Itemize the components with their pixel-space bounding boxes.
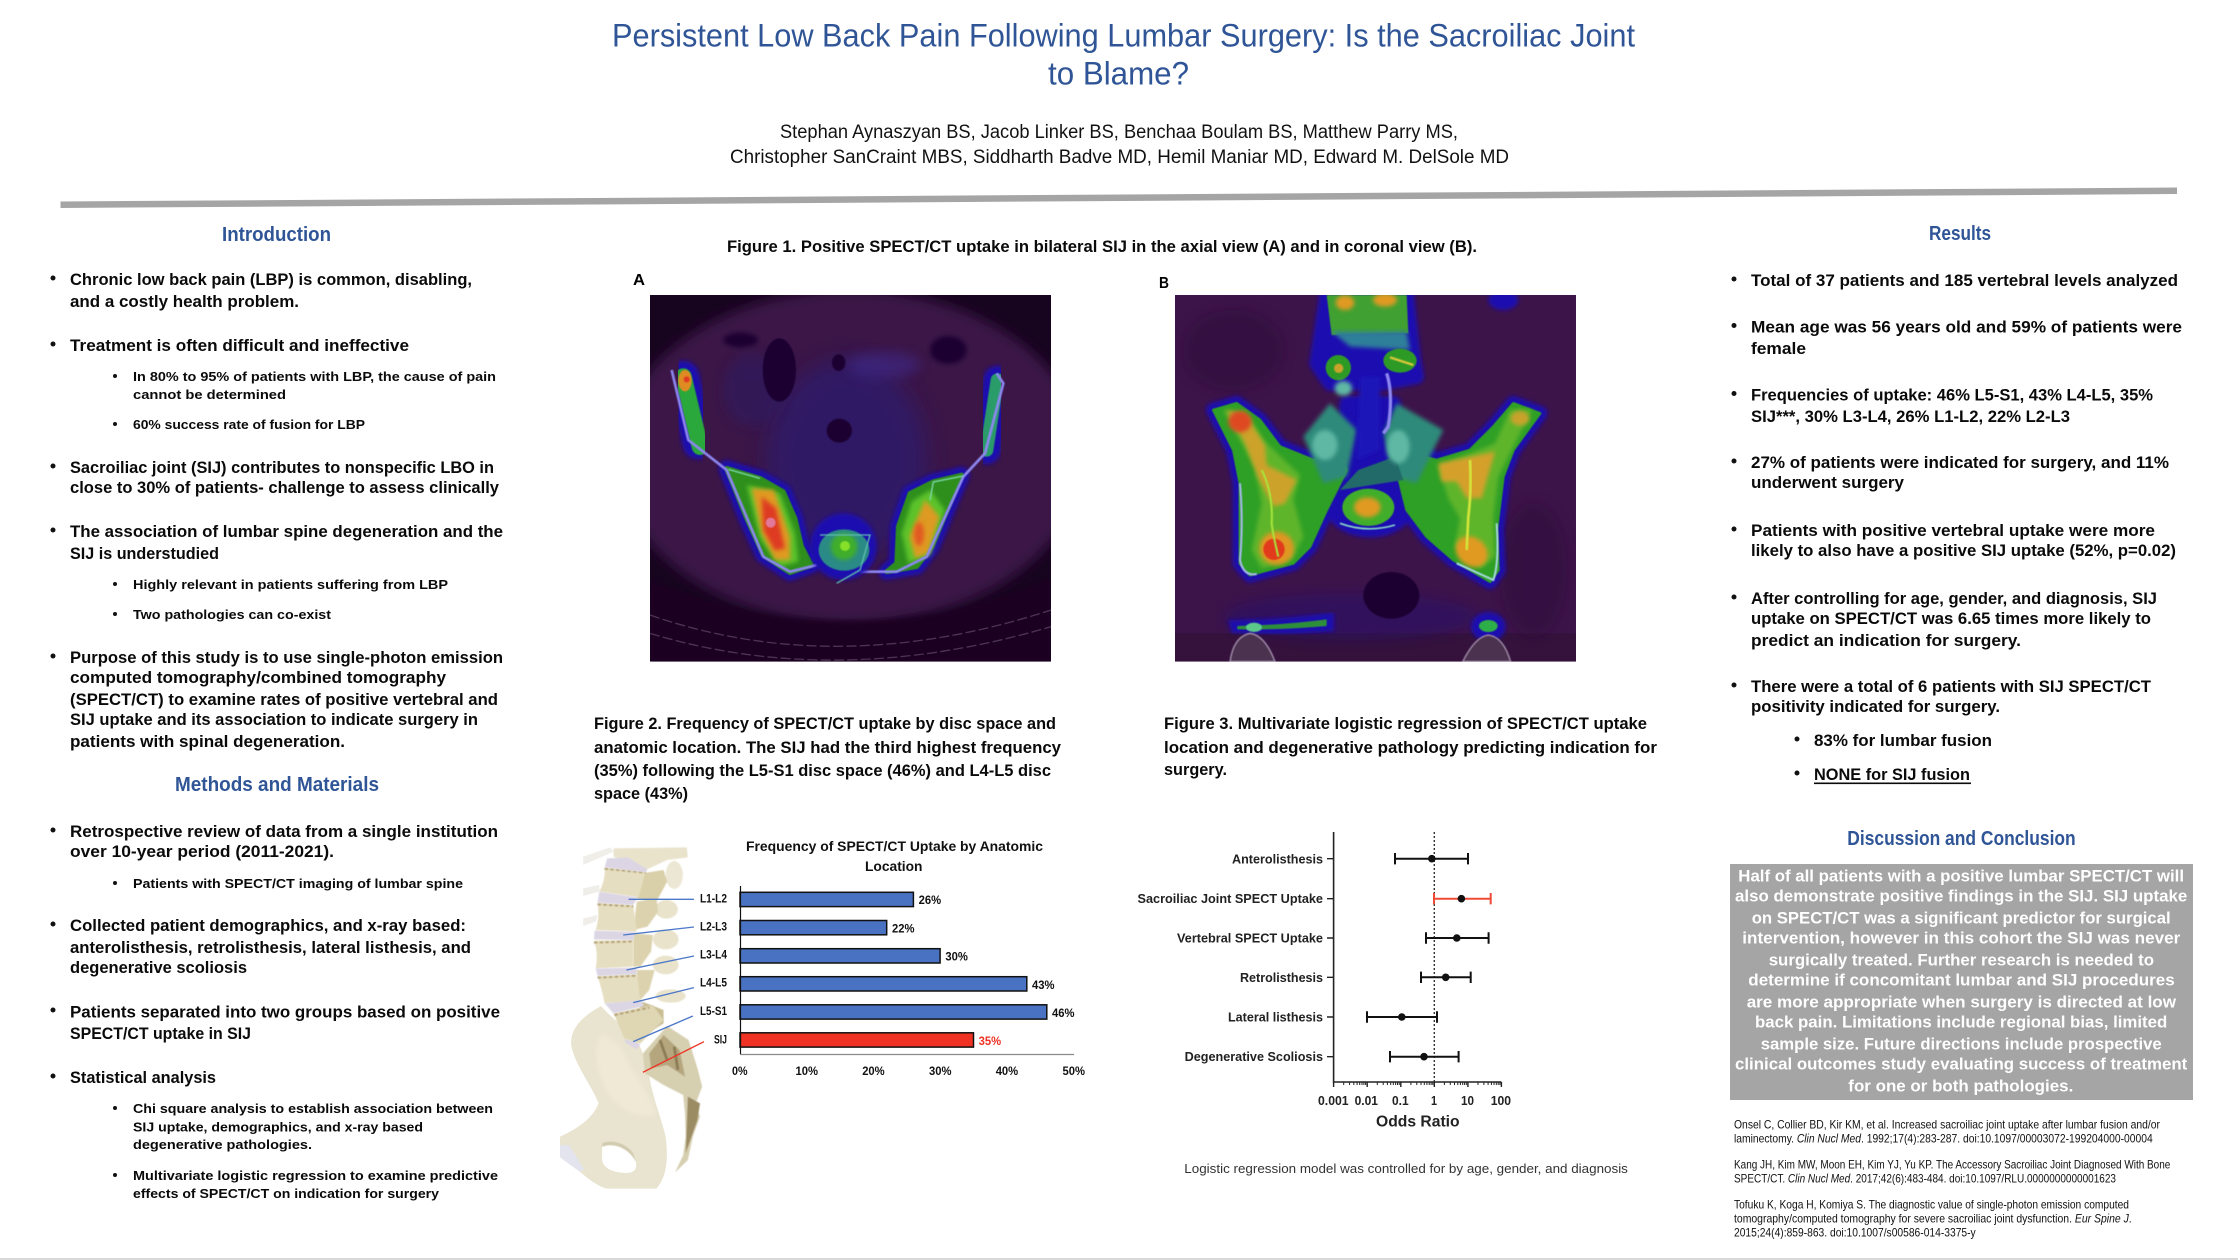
sacrum and coccyx [643,1026,702,1173]
references [1734,1118,2171,1240]
panel: conclusion callout: also demonstrate positive findings in the SIJ. SIJ uptake [1735,887,2187,906]
bullet: vertebral uptake [1732,522,2176,560]
chart title [746,839,1043,875]
bullet: purpose: computed tomography/combined tomography [70,669,447,687]
figure 3 caption [1164,715,1658,779]
bullet: vertebral uptake: Patients with positive vertebral uptake were more [1751,522,2155,540]
panel: conclusion callout: back pain. Limitations include regional bias, limited [1755,1012,2167,1031]
image: axial SPECT/CT scan A [650,295,1051,662]
footnote: Logistic regression model was controlled for by age, gender, and diagnosis [1184,1161,1628,1176]
bullet: sacroiliac joint [50,459,500,497]
heat map: right iliac uptake [860,373,1003,572]
category labels: L4-L5 [700,976,727,990]
bullet: controlled result: After controlling for age, gender, and diagnosis, SIJ [1751,590,2157,608]
bullet: statistical analysis: degenerative pathologies. [133,1137,312,1152]
references: SPECT/CT. Clin Nucl Med. 2017;42(6):483-484. doi:10.1097/RLU.0000000000001623 [1734,1172,2116,1186]
bullet: mean age [1732,318,2182,358]
bullet: mean age: Mean age was 56 years old and 59% of patients were [1751,318,2182,336]
heat map: butterfly halo [1213,295,1540,582]
bottom edge band [0,1258,2238,1260]
bullet: purpose: Purpose of this study is to use single-photon emission [70,649,503,667]
bullet: patient groups: Patients separated into two groups based on positive [70,1004,500,1022]
figure 3 caption: location and degenerative pathology predicting indication for [1164,739,1658,757]
x axis labels: 40% [996,1064,1018,1078]
panel: conclusion callout: are more appropriate when surgery is directed at low [1747,992,2177,1011]
bullet: chronic low back pain: Chronic low back pain (LBP) is common, disabling, [70,271,472,289]
bullet: association: SIJ is understudied [70,545,219,563]
bullet: retrospective review [50,823,498,891]
bullet: chronic low back pain [50,271,472,311]
panel: conclusion callout: on SPECT/CT was a significant predictor for surgical [1752,908,2171,927]
bullet: statistical analysis: Multivariate logistic regression to examine predictive [133,1168,498,1183]
bullet: retrospective review: Patients with SPECT/CT imaging of lumbar spine [133,876,463,891]
bullet: collected demographics: Collected patient demographics, and x-ray based: [70,917,466,935]
bullet: controlled result: predict an indication for surgery. [1751,632,2021,650]
chart title: Location [865,859,922,875]
figure 3 caption: surgery. [1164,761,1227,779]
category labels: L3-L4 [700,948,727,962]
bullet: collected demographics: anterolisthesis, retrolisthesis, lateral listhesis, and [70,939,471,957]
ribs [583,847,614,926]
value labels: 22% [892,922,915,936]
references: Onsel C, Collier BD, Kir KM, et al. Increased sacroiliac joint uptake after lumbar fusion and/or [1734,1118,2160,1132]
reference line at odds ratio 1 [1433,832,1435,1082]
panel: introduction and methods column [50,224,503,1201]
row labels: Anterolisthesis [1232,851,1323,866]
row labels: Lateral listhesis [1228,1010,1323,1025]
bullet: SIJ positive patients [1732,678,2151,784]
bullet: mean age: female [1751,340,1806,358]
x axis tick labels: 1 [1431,1093,1437,1108]
bullet: frequencies: Frequencies of uptake: 46% L5-S1, 43% L4-L5, 35% [1751,386,2153,404]
bullet: collected demographics: degenerative scoliosis [70,959,247,977]
figure 2 caption: Figure 2. Frequency of SPECT/CT uptake by disc space and [594,715,1056,733]
bullet: totals: Total of 37 patients and 185 vertebral levels analyzed [1751,272,2178,290]
label B: B [1159,275,1169,292]
bullet: statistical analysis: Statistical analysis [70,1069,216,1087]
x axis title: Odds Ratio [1376,1114,1460,1131]
row labels [1138,851,1323,1064]
bars [740,892,1047,1047]
bullet: SIJ positive patients: NONE for SIJ fusion [1814,766,1970,784]
panel: results [1732,223,2182,784]
heat map: central sacral uptake [810,513,877,588]
heat map: left iliac uptake [672,370,817,573]
panel: conclusion callout: sample size. Future directions include prospective [1761,1034,2162,1053]
interval: retrolisthesis [1421,972,1471,983]
figure 1 caption: Figure 1. Positive SPECT/CT uptake in bilateral SIJ in the axial view (A) and in coronal view (B). [727,238,1477,256]
x axis labels: 20% [862,1064,885,1078]
illustration: lumbar spine and pelvis [560,847,704,1189]
bullet: association: Highly relevant in patients suffering from LBP [133,577,448,592]
authors: Christopher SanCraint MBS, Siddharth Badve MD, Hemil Maniar MD, Edward M. DelSole MD [730,147,1509,168]
posterior processes [614,847,688,1037]
rectum air [1363,572,1419,619]
x axis labels: 10% [796,1064,818,1078]
bullet: purpose: patients with spinal degeneration. [70,733,345,751]
axes and ticks [1327,832,1501,1087]
bullet: statistical analysis: Chi square analysis to establish association between [133,1101,493,1116]
row labels: Vertebral SPECT Uptake [1177,931,1323,946]
panel: conclusion callout [1730,864,2193,1100]
vertebral bodies [594,867,664,1043]
category labels: L2-L3 [700,919,727,933]
panel: conclusion callout: surgically treated. Further research is needed to [1769,950,2154,969]
bullet: chronic low back pain: and a costly health problem. [70,293,299,311]
title [612,18,1635,92]
interval: sacroiliac joint uptake [1434,893,1491,904]
x axis tick labels: 0.1 [1392,1093,1409,1108]
heat map: right wing [1397,403,1540,582]
heading: methods and materials: Methods and Materials [175,774,379,796]
title: Persistent Low Back Pain Following Lumbar Surgery: Is the Sacroiliac Joint [612,18,1635,54]
x axis tick labels: 10 [1461,1093,1474,1108]
value labels: 43% [1032,978,1055,992]
bullet: treatment: 60% success rate of fusion for LBP [133,417,365,432]
bullet: surgery rates [1732,454,2169,492]
bullet: association: Two pathologies can co-exist [133,607,332,622]
bullet: SIJ positive patients: 83% for lumbar fusion [1814,732,1992,750]
category labels: L1-L2 [700,892,727,906]
bullet: controlled result: uptake on SPECT/CT was 6.65 times more likely to [1751,610,2151,628]
value labels: 46% [1052,1006,1075,1020]
bullet: statistical analysis: effects of SPECT/CT on indication for surgery [133,1186,440,1201]
figure 2 caption [594,715,1062,803]
bullet: surgery rates: 27% of patients were indicated for surgery, and 11% [1751,454,2169,472]
figure 2 caption: (35%) following the L5-S1 disc space (46%) and L4-L5 disc [594,762,1051,780]
axes [740,886,742,1054]
value labels: 30% [945,950,968,964]
interval: vertebral uptake [1426,932,1489,944]
row labels: Degenerative Scoliosis [1185,1049,1323,1064]
x axis labels: 50% [1062,1064,1085,1078]
bullet: sacroiliac joint: Sacroiliac joint (SIJ) contributes to nonspecific LBO in [70,459,494,477]
x axis tick labels: 0.01 [1355,1093,1378,1108]
figure 3 caption: Figure 3. Multivariate logistic regression of SPECT/CT uptake [1164,715,1647,733]
interval: anterolisthesis [1395,853,1468,864]
value labels [892,893,1075,1048]
bullet: purpose: (SPECT/CT) to examine rates of positive vertebral and [70,691,498,709]
x axis tick labels: 100 [1491,1093,1511,1108]
x axis line [740,1054,1074,1056]
bullet: controlled result [1732,590,2157,650]
bullet: statistical analysis [50,1069,498,1201]
category labels: L5-S1 [700,1004,727,1018]
bullet: sacroiliac joint: close to 30% of patients- challenge to assess clinically [70,479,500,497]
title: to Blame? [1048,56,1189,92]
heading: discussion and conclusion: Discussion and Conclusion [1847,828,2076,850]
bullet: SIJ positive patients: positivity indicated for surgery. [1751,698,2000,716]
bullet: retrospective review: over 10-year period (2011-2021). [70,843,334,861]
x axis labels [732,1064,1085,1078]
bullet: SIJ positive patients: There were a total of 6 patients with SIJ SPECT/CT [1751,678,2151,696]
image: coronal SPECT/CT scan B [1175,290,1576,662]
references: tomography/computed tomography for severe sacroiliac joint dysfunction. Eur Spine J. [1734,1212,2132,1226]
bullet: collected demographics [50,917,471,977]
bullet: treatment: In 80% to 95% of patients with LBP, the cause of pain [133,369,496,384]
panel: conclusion callout: for one or both pathologies. [1848,1076,2073,1095]
figure 2 caption: anatomic location. The SIJ had the third highest frequency [594,739,1062,757]
bullet: association: The association of lumbar spine degeneration and the [70,523,503,541]
forest plot: odds ratios [1138,832,1628,1176]
panel: conclusion callout: intervention, however in this cohort the SIJ was never [1742,929,2181,948]
references: laminectomy. Clin Nucl Med. 1992;17(4):283-287. doi:10.1097/00003072-199204000-00004 [1734,1132,2153,1146]
category labels: SIJ [714,1032,727,1046]
references: Tofuku K, Koga H, Komiya S. The diagnostic value of single-photon emission computed [1734,1198,2129,1212]
x axis tick labels [1318,1093,1511,1108]
level pointer lines [623,899,694,1042]
bullet: purpose: SIJ uptake and its association to indicate surgery in [70,711,478,729]
x axis tick labels: 0.001 [1318,1093,1349,1108]
bar chart: frequency of uptake [700,839,1085,1078]
authors [730,122,1509,168]
interval: degenerative scoliosis [1390,1051,1459,1062]
bullet: surgery rates: underwent surgery [1751,474,1905,492]
panel: conclusion callout: clinical outcomes study evaluating success of treatment [1735,1055,2188,1074]
bullet: patient groups: SPECT/CT uptake in SIJ [70,1025,251,1043]
figure 2 caption: space (43%) [594,785,688,803]
bullet: purpose [50,649,503,751]
bullet: frequencies: SIJ***, 30% L3-L4, 26% L1-L2, 22% L2-L3 [1751,408,2070,426]
value labels: 35% [979,1034,1001,1048]
references: Kang JH, Kim MW, Moon EH, Kim YJ, Yu KP. The Accessory Sacroiliac Joint Diagnosed With Bone [1734,1158,2171,1172]
value labels: 26% [919,893,941,907]
label A: A [633,272,645,289]
x axis labels: 30% [929,1064,952,1078]
bullet: patient groups [50,1004,500,1043]
interval: lateral listhesis [1367,1011,1437,1023]
bullet: frequencies [1732,386,2153,426]
category labels [700,892,727,1046]
chart title: Frequency of SPECT/CT Uptake by Anatomic [746,839,1043,855]
bullet: treatment: cannot be determined [133,387,286,402]
references: 2015;24(4):859-863. doi:10.1007/s00586-014-3375-y [1734,1226,1976,1240]
intervertebral discs [594,857,647,1049]
bullet: vertebral uptake: likely to also have a positive SIJ uptake (52%, p=0.02) [1751,542,2176,560]
heat map: left wing [1213,403,1347,575]
header divider [60,188,2177,208]
authors: Stephan Aynaszyan BS, Jacob Linker BS, Benchaa Boulam BS, Matthew Parry MS, [780,122,1458,143]
bullet: statistical analysis: SIJ uptake, demographics, and x-ray based [133,1120,423,1134]
heading: introduction: Introduction [222,224,331,246]
bullet: association [50,523,503,622]
femoral heads and lower uptake [1230,612,1511,662]
bullet: retrospective review: Retrospective review of data from a single institution [70,823,498,841]
panel: conclusion callout: determine if concomitant lumbar and SIJ procedures [1748,970,2175,989]
x axis labels: 0% [732,1064,748,1078]
pelvis [560,1006,667,1189]
bullet: treatment [50,337,496,432]
row labels: Sacroiliac Joint SPECT Uptake [1138,891,1323,906]
SIJ pointer line [643,1042,704,1072]
bullet: treatment: Treatment is often difficult and ineffective [70,337,409,355]
panel: conclusion callout: Half of all patients with a positive lumbar SPECT/CT will [1738,867,2184,886]
heading: results: Results [1929,223,1991,245]
row labels: Retrolisthesis [1240,970,1323,985]
heat map: central sacrum and facets [1303,293,1443,529]
